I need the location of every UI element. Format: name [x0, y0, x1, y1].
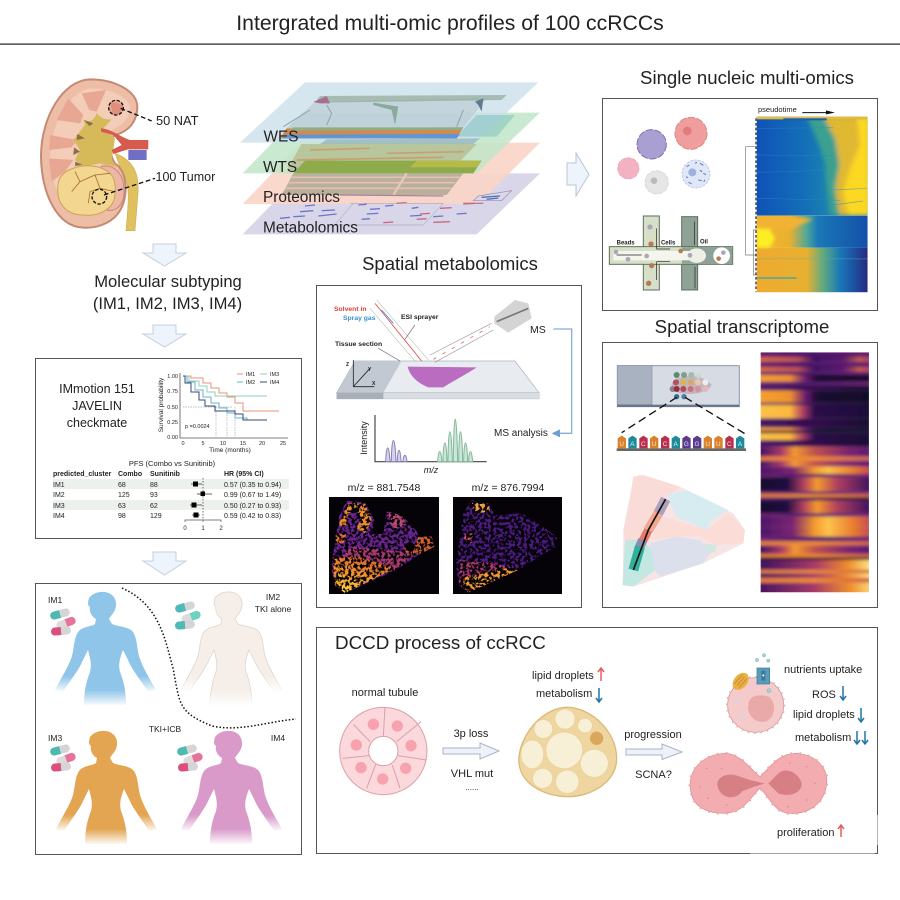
- Kaplan-Meier chart: IM3: [270, 372, 279, 378]
- kidney illustration with sampling sites: [41, 79, 155, 231]
- schematic labels: [334, 306, 439, 387]
- Kaplan-Meier chart: 0.00: [167, 435, 178, 441]
- layer label: Proteomics: Proteomics: [263, 189, 340, 206]
- label: MS: MS: [530, 324, 546, 336]
- labels: 3p loss and VHL: VHL mut: [451, 768, 493, 780]
- lipid droplets and metabolism labels: [532, 670, 594, 700]
- forest plot table: IM1: [53, 482, 65, 489]
- panel: cohort survival and forest plot: [36, 358, 302, 538]
- forest plot table: HR (95% CI): [224, 471, 264, 478]
- barcode sequence: [618, 436, 744, 448]
- body IM4: [175, 731, 285, 845]
- heading: molecular subtyping: [93, 272, 242, 313]
- ion image: m/z 881.7548: m/z = 881.7548: [348, 482, 420, 494]
- spatial clusters with trajectory: [623, 475, 745, 587]
- Kaplan-Meier chart: 15: [240, 441, 246, 447]
- schematic labels: X: [372, 381, 376, 387]
- forest plot table: 2: [219, 526, 223, 532]
- panel: spatial metabolomics: [316, 286, 582, 608]
- Kaplan-Meier chart: 5: [201, 441, 205, 447]
- label: pseudotime: pseudotime: [758, 105, 797, 114]
- pseudotime heatmap: [746, 110, 870, 292]
- barcode sequence: C: [663, 441, 668, 448]
- subtype labels: IM3: [48, 733, 62, 743]
- inferno gene expression heatmap: [760, 352, 869, 592]
- forest plot table: 1: [201, 526, 205, 532]
- cohort names: checkmate: [67, 416, 127, 430]
- heading: DCCD process: DCCD process of ccRCC: [335, 632, 546, 653]
- lipid droplets and metabolism labels: metabolism: [536, 688, 592, 700]
- subtype labels: [48, 592, 291, 743]
- cell state labels: ROS: [812, 689, 836, 701]
- layer label: WTS: WTS: [263, 159, 297, 176]
- forest plot table: 62: [150, 503, 158, 510]
- barcode sequence: A: [674, 441, 679, 448]
- arrow: omics to single nucleus: [567, 153, 589, 196]
- labels: 3p loss and VHL: [451, 728, 493, 792]
- microfluidic droplet chip: [609, 216, 733, 290]
- layer label: WES: WES: [264, 128, 299, 146]
- Kaplan-Meier chart: 10: [220, 441, 226, 447]
- forest plot table: 0: [183, 526, 187, 532]
- multi-omic stacked layers: [240, 82, 540, 234]
- labels: progression and SCNA: progression: [624, 729, 682, 741]
- arrow: progression: [626, 744, 682, 760]
- spectrum axis labels: [359, 421, 439, 475]
- cohort names: JAVELIN: [72, 399, 122, 413]
- layer label: Metabolomics: Metabolomics: [263, 220, 358, 236]
- nuclei illustrations: [618, 117, 710, 194]
- Kaplan-Meier chart: 0: [181, 441, 185, 447]
- pills IM2: [174, 601, 202, 630]
- clear cell with nutrient channel: [727, 654, 784, 733]
- forest plot table: 0.59 (0.42 to 0.83): [224, 513, 281, 520]
- Kaplan-Meier chart: 0.25: [167, 420, 178, 426]
- cell state labels: proliferation: [777, 827, 834, 839]
- arrow: subtyping to cohorts: [143, 325, 186, 347]
- forest plot table: 63: [118, 503, 126, 510]
- lipid droplet cell: [519, 707, 617, 797]
- barcode sequence: G: [684, 441, 689, 448]
- forest plot table: 93: [150, 492, 158, 499]
- label: 100 Tumor: 100 Tumor: [156, 170, 215, 184]
- Kaplan-Meier chart: p =0.0024: [185, 424, 210, 430]
- Kaplan-Meier chart: 1.00: [167, 374, 178, 380]
- barcode sequence: C: [727, 441, 732, 448]
- forest plot table: Sunitinib: [150, 471, 180, 478]
- forest plot table: Combo: [118, 471, 142, 478]
- subtype labels: IM1: [48, 595, 62, 605]
- Kaplan-Meier chart: 0.75: [167, 389, 178, 395]
- Kaplan-Meier chart: Time (months): [209, 447, 251, 454]
- icons: change arrows: [838, 686, 868, 837]
- lipid droplets and metabolism labels: lipid droplets: [532, 670, 594, 682]
- Kaplan-Meier chart: [158, 372, 288, 454]
- body IM2: [175, 592, 285, 706]
- pills IM4: [176, 744, 204, 772]
- normal tubule illustration: [340, 707, 427, 795]
- forest plot table: IM4: [53, 513, 65, 520]
- pills IM3: [49, 744, 77, 772]
- arrow: kidney to subtyping: [143, 244, 186, 266]
- body IM3: [50, 731, 160, 845]
- Kaplan-Meier chart: 0.50: [167, 405, 178, 411]
- schematic labels: Spray gas: [343, 315, 376, 322]
- label: normal tubule: normal tubule: [352, 687, 418, 699]
- dotted divider between treatments: [122, 588, 296, 728]
- subtype labels: TKI+ICB: [149, 724, 182, 734]
- Kaplan-Meier chart: IM4: [270, 380, 279, 386]
- microfluidic droplet chip: Cells: [661, 240, 676, 246]
- forest plot table: predicted_cluster: [53, 471, 112, 478]
- schematic labels: ESI sprayer: [401, 314, 439, 321]
- microfluidic droplet chip: Oil: [700, 239, 708, 245]
- capture slide: [617, 366, 746, 451]
- forest plot table: 88: [150, 482, 158, 489]
- label: 50 NAT: 50 NAT: [156, 113, 199, 128]
- label: MS analysis: MS analysis: [494, 428, 548, 439]
- slide and sprayer schematic: [337, 300, 572, 462]
- forest plot table: 129: [150, 513, 162, 520]
- heading: molecular subtyping: (IM1, IM2, IM3, IM4): [93, 294, 242, 313]
- schematic labels: Y: [368, 367, 372, 373]
- cohort names: IMmotion 151: [59, 382, 135, 396]
- barcode sequence: U: [705, 441, 710, 448]
- schematic labels: Solvent in: [334, 306, 366, 313]
- pills IM1: [49, 608, 77, 636]
- Kaplan-Meier chart: 20: [259, 441, 265, 447]
- labels: progression and SCNA: [624, 729, 682, 781]
- barcode sequence: A: [738, 441, 743, 448]
- cell state labels: lipid droplets: [793, 709, 855, 721]
- labels: 3p loss and VHL: ......: [465, 783, 479, 792]
- ion image: m/z 881.7548: [329, 482, 439, 594]
- heading: spatial metabolomics: Spatial metabolomics: [362, 253, 538, 274]
- arrow: 3p loss: [443, 743, 499, 759]
- subtype labels: IM2: [266, 592, 280, 602]
- panel: treatment by subtype: [36, 584, 302, 854]
- heading: single nucleic multi-omics: Single nucleic multi-omics: [640, 67, 854, 88]
- Kaplan-Meier chart: 25: [280, 441, 286, 447]
- icon: red up arrow: [598, 668, 604, 681]
- barcode sequence: U: [716, 441, 721, 448]
- arrow: trials to treatment: [143, 552, 186, 575]
- ion image: m/z 876.7994: m/z = 876.7994: [472, 482, 544, 494]
- subtype labels: IM4: [271, 733, 285, 743]
- forest plot table: 125: [118, 492, 130, 499]
- barcode sequence: U: [619, 441, 624, 448]
- barcode sequence: A: [630, 441, 635, 448]
- Kaplan-Meier chart: Survival probability: [158, 377, 165, 432]
- barcode sequence: G: [695, 441, 700, 448]
- forest plot table: 0.99 (0.67 to 1.49): [224, 492, 281, 499]
- forest plot table: 0.50 (0.27 to 0.93): [224, 503, 281, 510]
- forest plot table: IM3: [53, 503, 65, 510]
- forest plot table: [53, 459, 289, 532]
- Kaplan-Meier chart: IM2: [246, 380, 255, 386]
- barcode sequence: C: [641, 441, 646, 448]
- cohort names: [59, 382, 135, 430]
- body IM1: [49, 592, 159, 706]
- ion image: m/z 876.7994: [453, 482, 562, 594]
- cell state labels: [777, 664, 862, 839]
- schematic labels: Tissue section: [335, 341, 382, 348]
- forest plot table: PFS (Combo vs Sunitinib): [129, 459, 216, 468]
- icon: blue down arrow: [596, 688, 602, 702]
- schematic labels: Z: [346, 362, 349, 368]
- subtype labels: TKI alone: [255, 604, 291, 614]
- forest plot table: IM2: [53, 492, 65, 499]
- cell state labels: nutrients uptake: [784, 664, 862, 676]
- forest plot table: 0.57 (0.35 to 0.94): [224, 482, 281, 489]
- labels: 3p loss and VHL: 3p loss: [454, 728, 489, 740]
- spectrum axis labels: Intensity: [359, 421, 369, 455]
- panel: DCCD process: [316, 628, 880, 855]
- microfluidic droplet chip: Beads: [617, 240, 635, 246]
- heading: spatial transcriptome: Spatial transcriptome: [655, 316, 829, 337]
- title: Intergrated multi-omic profiles of 100 ccRCCs: [236, 12, 664, 35]
- forest plot table: 68: [118, 482, 126, 489]
- spectrum axis labels: m/z: [424, 465, 439, 475]
- cell state labels: metabolism: [795, 732, 851, 744]
- panel: spatial transcriptome: [602, 342, 878, 608]
- dividing cell: [690, 753, 827, 813]
- heading: molecular subtyping: Molecular subtyping: [94, 272, 242, 291]
- barcode sequence: U: [652, 441, 657, 448]
- forest plot table: 98: [118, 513, 126, 520]
- Kaplan-Meier chart: IM1: [246, 372, 255, 378]
- panel: single nucleic multi-omics: [602, 98, 878, 310]
- labels: progression and SCNA: SCNA?: [635, 769, 672, 781]
